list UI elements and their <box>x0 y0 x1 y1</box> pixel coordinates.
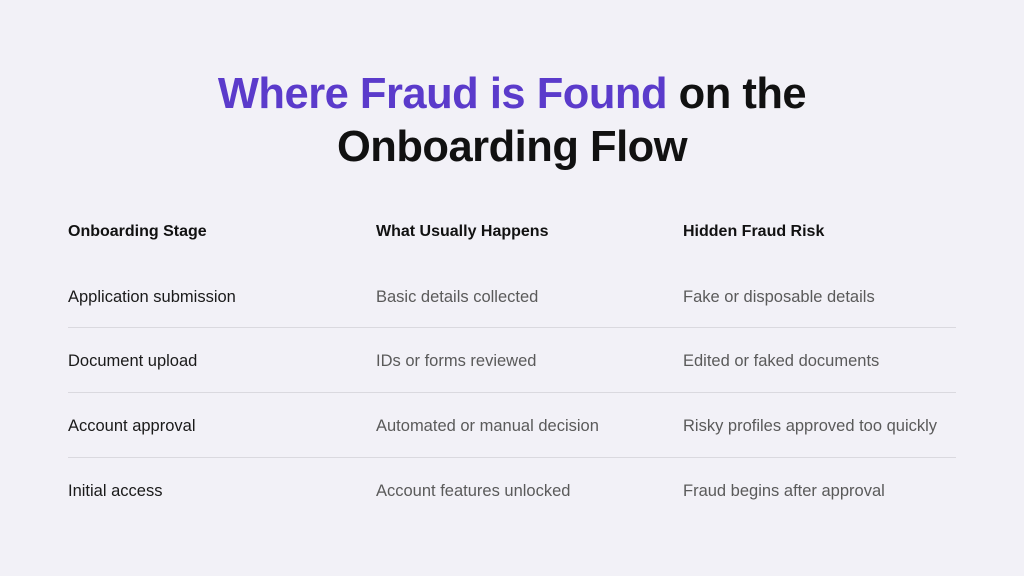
row: account approval: Risky profiles approved too quickly <box>683 417 937 435</box>
header row: What Usually Happens <box>376 223 548 240</box>
row: document upload <box>68 352 879 370</box>
row: account approval: Automated or manual decision <box>376 417 599 435</box>
header row: Hidden Fraud Risk <box>683 223 824 240</box>
header row <box>68 223 824 240</box>
row: initial access: Fraud begins after approval <box>683 482 885 500</box>
row: document upload: Document upload <box>68 352 197 370</box>
row: account approval: Account approval <box>68 417 196 435</box>
header row: Onboarding Stage <box>68 223 207 240</box>
row: application submission: Fake or disposable details <box>683 288 875 306</box>
row: initial access: Account features unlocked <box>376 482 570 500</box>
row: application submission <box>68 288 875 306</box>
title: Where Fraud is Found on the <box>218 70 806 118</box>
row: initial access: Initial access <box>68 482 162 500</box>
row: account approval <box>68 417 937 435</box>
row: document upload: Edited or faked documents <box>683 352 879 370</box>
row: document upload: IDs or forms reviewed <box>376 352 536 370</box>
row: application submission: Application submission <box>68 288 236 306</box>
title <box>218 70 806 171</box>
title: Onboarding Flow <box>337 123 687 171</box>
row: application submission: Basic details collected <box>376 288 538 306</box>
row: initial access <box>68 482 885 500</box>
